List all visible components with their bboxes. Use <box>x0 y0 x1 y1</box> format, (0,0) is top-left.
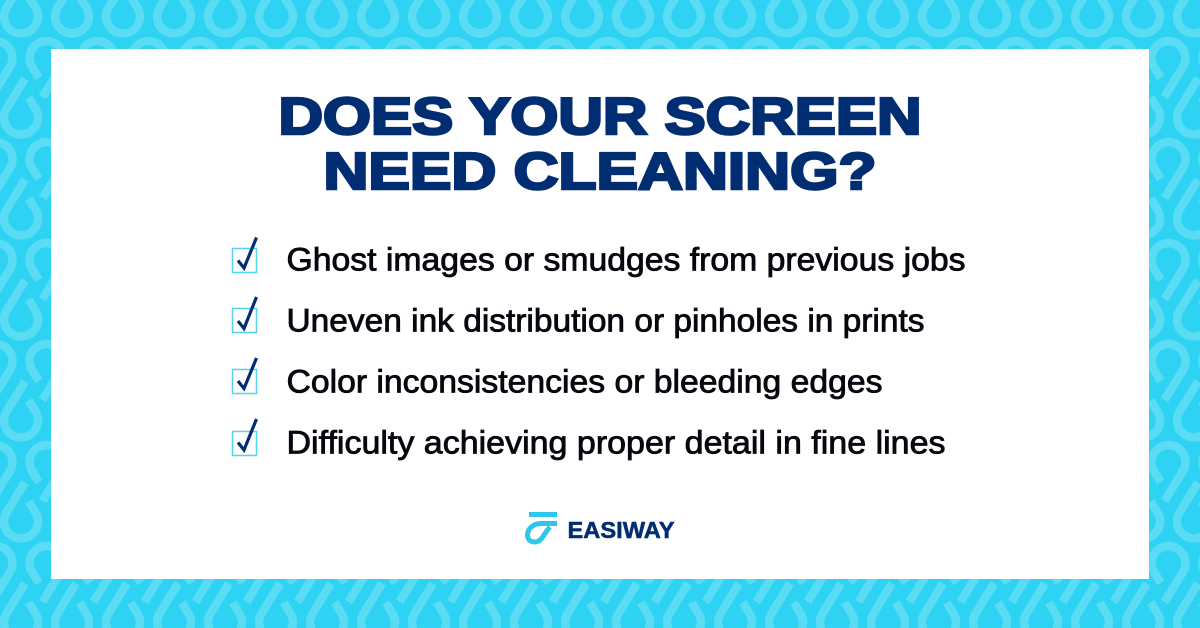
title: DOES YOUR SCREEN <box>278 88 922 146</box>
item 4: Difficulty achieving proper detail in fine lines <box>286 424 946 460</box>
item 1: Ghost images or smudges from previous jobs <box>286 242 966 278</box>
title <box>278 88 922 201</box>
wordmark: EASIWAY <box>568 517 674 543</box>
logo: Easiway <box>528 512 674 543</box>
icon: logo mark <box>528 512 557 542</box>
panel: white card <box>51 49 1149 579</box>
title: NEED CLEANING? <box>324 143 876 201</box>
checklist <box>232 238 966 460</box>
item 3: Color inconsistencies or bleeding edges <box>286 364 882 400</box>
item 2: Uneven ink distribution or pinholes in prints <box>286 302 924 338</box>
